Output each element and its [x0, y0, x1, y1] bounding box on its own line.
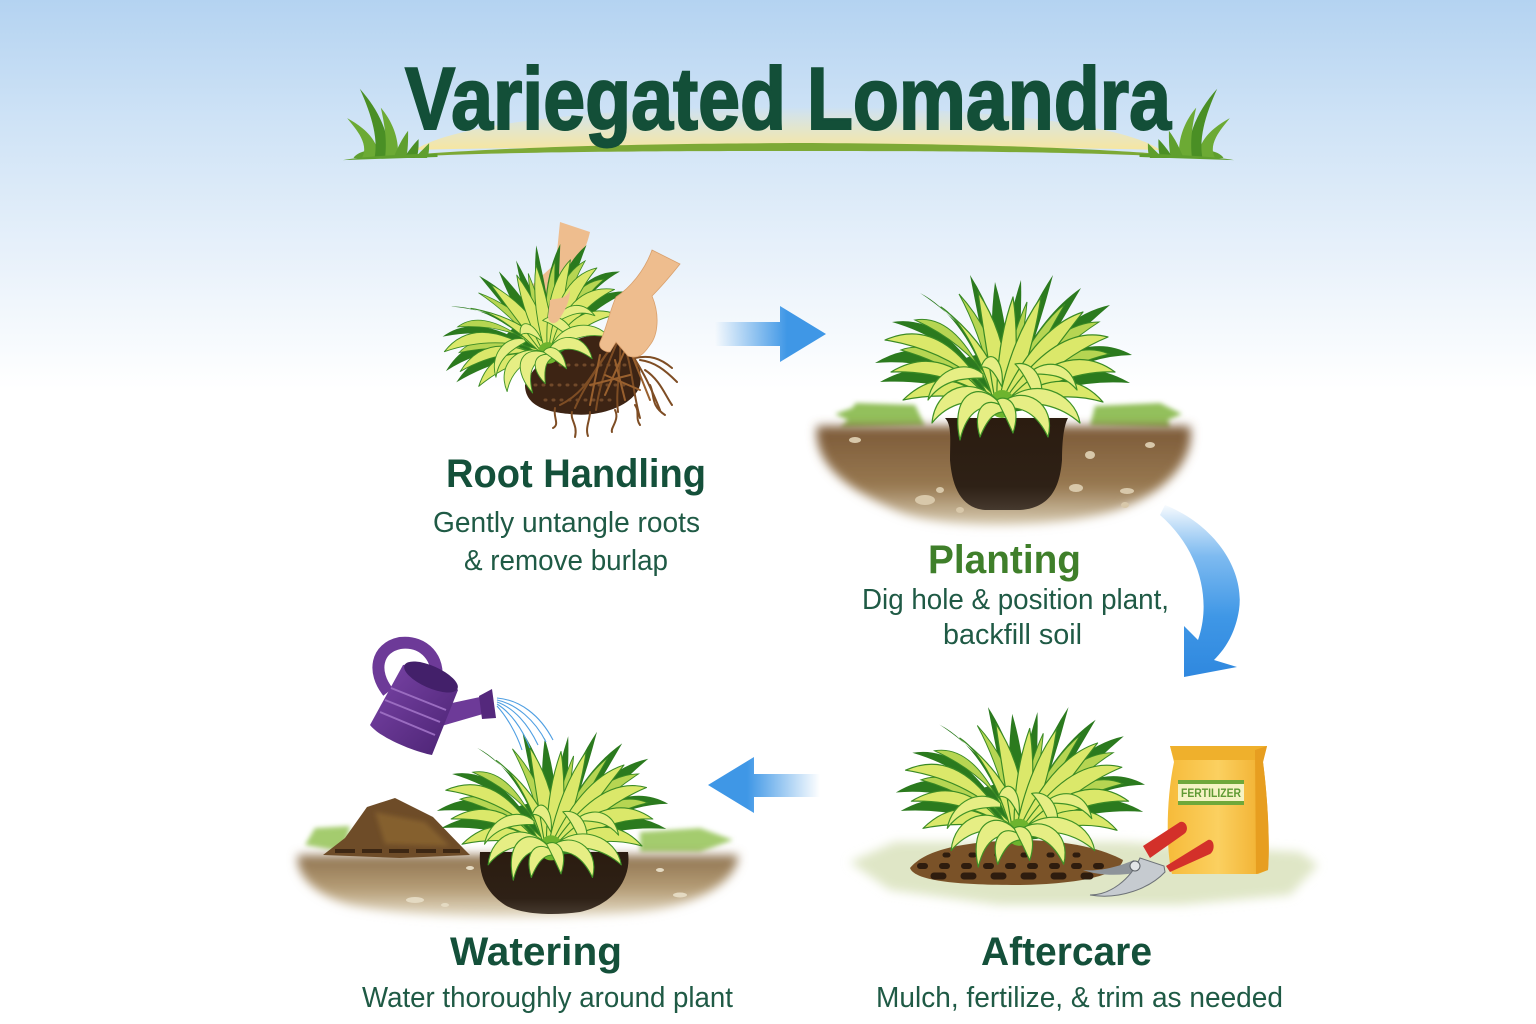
- label: watering: [362, 930, 733, 1014]
- description: Mulch, fertilize, & trim as needed: [876, 982, 1283, 1014]
- right hand: [600, 250, 680, 357]
- plant tuft: [437, 732, 668, 880]
- left hand behind plant: [528, 222, 590, 320]
- soil pile: [323, 798, 470, 858]
- grass edge left: [835, 403, 925, 428]
- watering can: [370, 643, 496, 755]
- title text: Variegated Lomandra: [405, 49, 1172, 148]
- plant tuft: [875, 275, 1132, 440]
- step 3: aftercare illustration: [850, 707, 1318, 905]
- root ball: [525, 335, 641, 415]
- body: [370, 665, 458, 755]
- arrow: root handling to planting: [715, 306, 826, 362]
- arrow: planting to aftercare: [1160, 505, 1240, 677]
- grass edge right: [1090, 403, 1182, 428]
- grass patch left: [305, 826, 350, 852]
- fertilizer bag: [1168, 746, 1269, 874]
- label: planting: [862, 538, 1169, 651]
- title banner: [343, 49, 1234, 160]
- step 4: watering illustration: [298, 643, 738, 917]
- arrow: aftercare to watering: [708, 757, 820, 813]
- ground patch: [850, 842, 1318, 905]
- plant tuft: [896, 707, 1145, 867]
- banner swoosh: [345, 143, 1232, 160]
- grass tuft left: [343, 89, 438, 160]
- planting hole: [480, 852, 629, 914]
- plant tuft: [414, 216, 651, 424]
- left hand fingers: [548, 290, 570, 323]
- description: Dig hole & position plant,: [862, 584, 1169, 616]
- label: root handling: [433, 452, 706, 577]
- description: Gently untangle roots: [433, 507, 700, 539]
- ground patch: [298, 855, 738, 917]
- heading: Root Handling: [446, 452, 706, 496]
- planting hole: [945, 418, 1068, 510]
- pruners: [1083, 822, 1214, 896]
- pebbles: [406, 866, 687, 907]
- heading: Watering: [450, 930, 622, 974]
- description: Water thoroughly around plant: [362, 982, 733, 1014]
- loose roots: [553, 340, 677, 437]
- spout: [438, 697, 483, 727]
- handle: [378, 643, 437, 692]
- grass patch right: [640, 828, 733, 852]
- heading: Aftercare: [981, 930, 1152, 974]
- pebbles: [849, 437, 1155, 513]
- label: root handling: & remove burlap: [464, 545, 668, 577]
- banner cream glow: [415, 106, 1160, 150]
- label: planting: backfill soil: [943, 619, 1082, 651]
- step 2: planting illustration: [817, 275, 1191, 525]
- heading: Planting: [928, 538, 1081, 582]
- bag label: FERTILIZER: [1181, 788, 1242, 800]
- grass tuft right: [1140, 89, 1234, 160]
- mulch: [910, 840, 1123, 885]
- label: aftercare: [876, 930, 1283, 1014]
- water spray: [497, 698, 553, 750]
- step 1: root handling illustration: [414, 216, 680, 437]
- soil bank: [817, 426, 1191, 525]
